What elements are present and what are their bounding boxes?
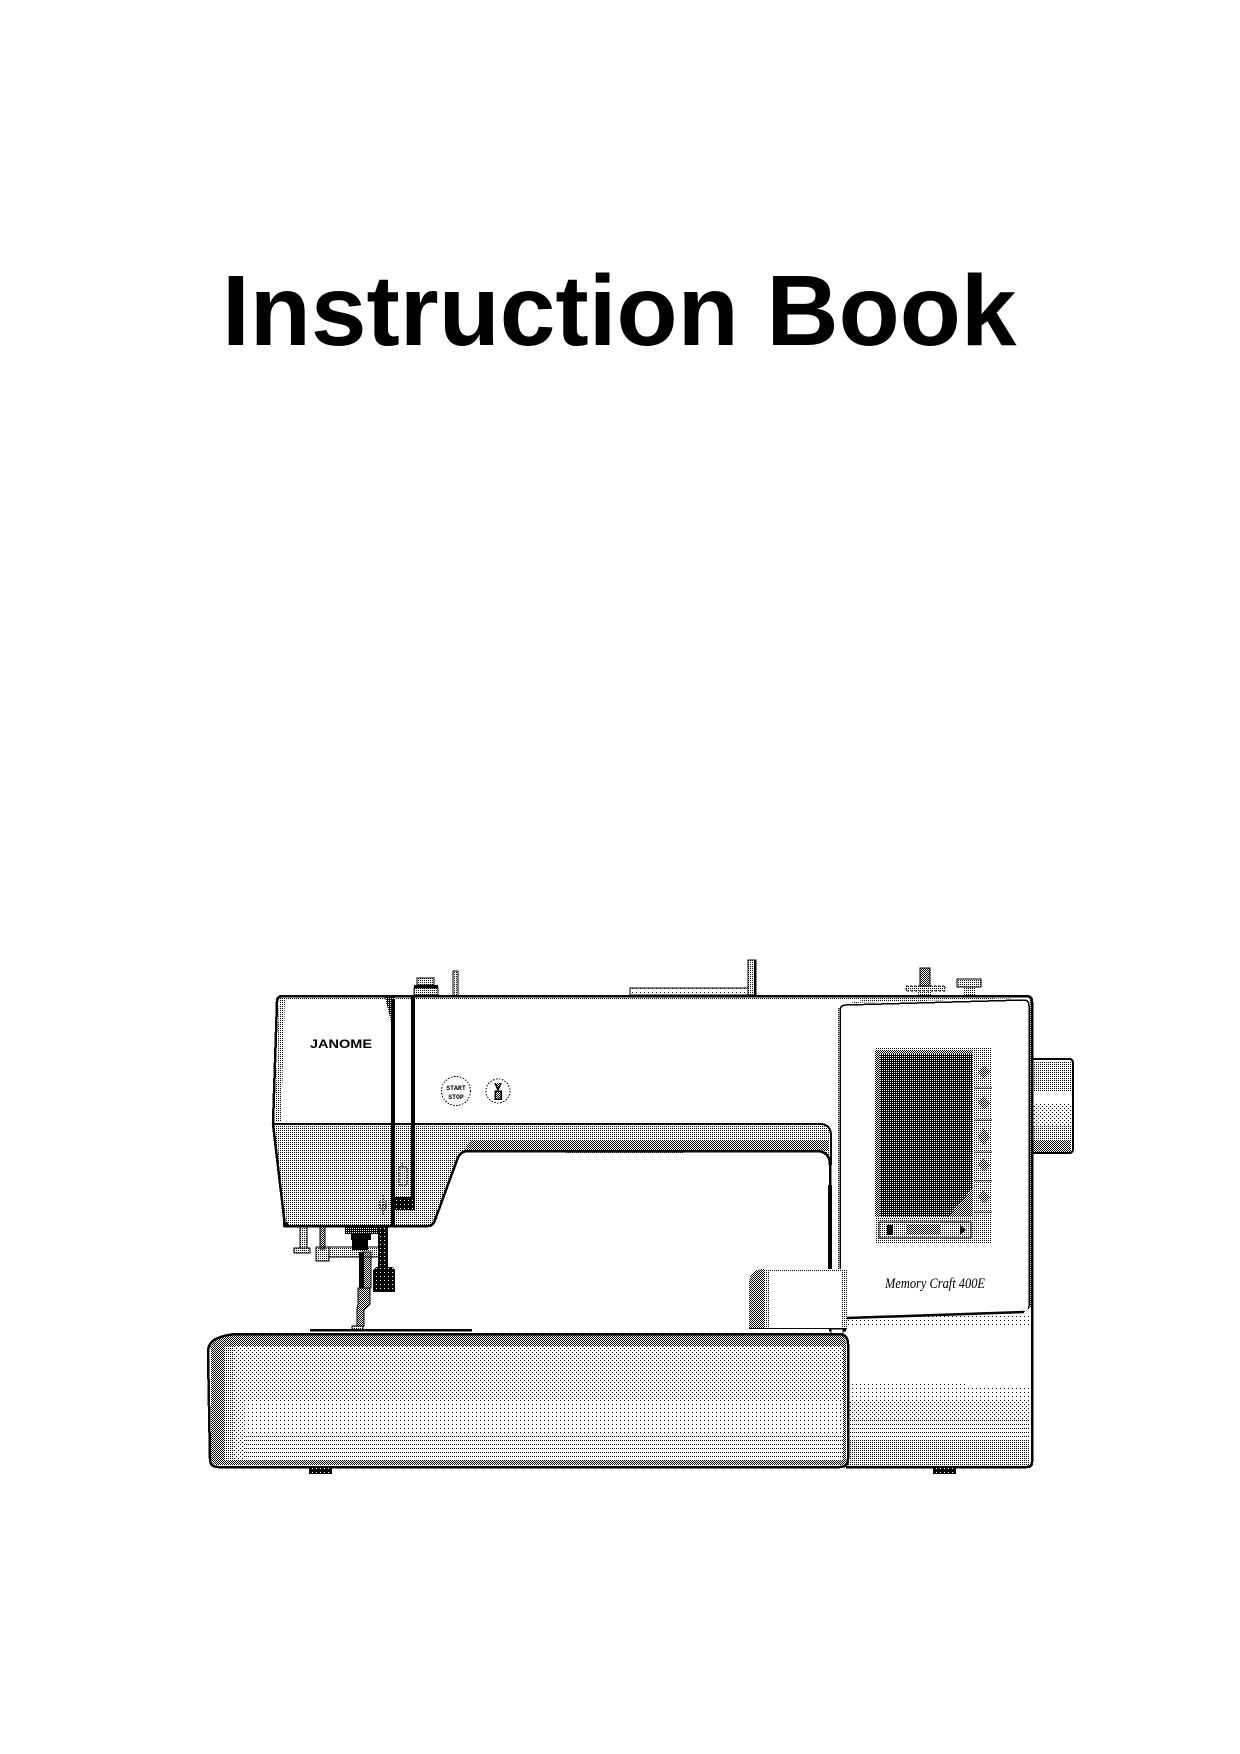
base right section [846,1002,1032,1467]
start stop button [442,1076,470,1106]
title: Instruction Book [222,255,1017,367]
top spool pins and thread holder [414,960,981,996]
needle plate [310,1329,472,1331]
machine body outline [273,996,1032,1330]
sewing bed base [208,1330,848,1467]
start stop button: STOP [448,1094,464,1101]
brand logo: JANOME [310,1037,372,1051]
lower arm shaded band [273,1124,832,1269]
speed button [486,1079,510,1103]
head top edge shading [285,997,985,999]
head left edge shading [275,998,285,1122]
illustration: sewing machine [208,960,1073,1474]
start stop button: START [446,1085,466,1092]
model name: Memory Craft 400E [884,1276,985,1292]
rubber feet [309,1468,956,1474]
bobbin cover box [749,1269,847,1335]
touch screen [875,1047,992,1243]
thread path lines [379,996,415,1226]
needle and presser foot assembly [294,1227,395,1330]
control panel [837,996,1031,1318]
handwheel [1032,1059,1073,1153]
